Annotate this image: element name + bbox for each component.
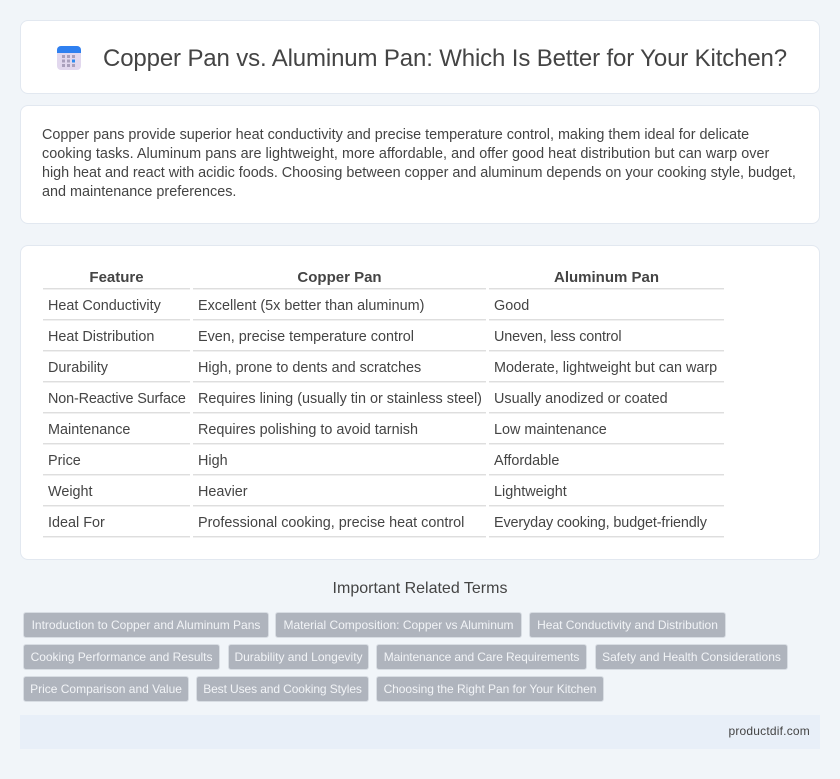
row: non-reactive surface: Usually anodized or coated bbox=[494, 391, 668, 407]
row: heat conductivity: Excellent (5x better than aluminum) bbox=[198, 298, 424, 314]
panel: comparison table bbox=[20, 245, 820, 560]
row: durability: Durability bbox=[48, 360, 108, 376]
row: ideal for: Professional cooking, precise heat control bbox=[198, 515, 464, 531]
row: maintenance: Requires polishing to avoid tarnish bbox=[198, 422, 418, 438]
table header: Feature bbox=[89, 269, 144, 286]
icon: calendar bbox=[57, 46, 81, 70]
tags: related terms: Maintenance and Care Requirements bbox=[384, 650, 579, 664]
title: Copper Pan vs. Aluminum Pan: Which Is Better for Your Kitchen? bbox=[103, 45, 787, 72]
tags: related terms: Heat Conductivity and Distribution bbox=[537, 618, 718, 632]
row: price: Price bbox=[48, 453, 81, 469]
row: price: High bbox=[198, 453, 228, 469]
text block: intro: cooking tasks. Aluminum pans are lightweight, more affordable, and offer good heat distribution but can warp over bbox=[42, 146, 769, 162]
panel: intro bbox=[20, 105, 820, 224]
row: heat conductivity: Good bbox=[494, 298, 529, 314]
table header bbox=[89, 269, 659, 286]
text block: intro: Copper pans provide superior heat conductivity and precise temperature control, making them ideal for delicate bbox=[42, 127, 749, 143]
footer source text: productdif.com bbox=[728, 724, 810, 738]
row: weight bbox=[48, 484, 567, 500]
tags: related terms bbox=[23, 612, 788, 702]
row: maintenance: Low maintenance bbox=[494, 422, 607, 438]
tags: related terms: Choosing the Right Pan for Your Kitchen bbox=[384, 682, 596, 696]
row: ideal for: Everyday cooking, budget-friendly bbox=[494, 515, 707, 531]
row: maintenance: Maintenance bbox=[48, 422, 130, 438]
row: durability: High, prone to dents and scratches bbox=[198, 360, 421, 376]
row: maintenance bbox=[48, 422, 607, 438]
row: weight: Lightweight bbox=[494, 484, 567, 500]
row: non-reactive surface bbox=[48, 391, 668, 407]
row: non-reactive surface: Non-Reactive Surface bbox=[48, 391, 186, 407]
table header: Copper Pan bbox=[297, 269, 382, 286]
text block: intro bbox=[42, 127, 796, 200]
row: heat distribution: Even, precise temperature control bbox=[198, 329, 414, 345]
row: weight: Heavier bbox=[198, 484, 248, 500]
tags: related terms: Best Uses and Cooking Styles bbox=[203, 682, 362, 696]
heading: related terms: Important Related Terms bbox=[333, 580, 507, 597]
row: heat conductivity bbox=[48, 298, 529, 314]
row: heat distribution: Uneven, less control bbox=[494, 329, 621, 345]
text block: intro: and maintenance preferences. bbox=[42, 184, 236, 200]
row: ideal for: Ideal For bbox=[48, 515, 105, 531]
row: non-reactive surface: Requires lining (usually tin or stainless steel) bbox=[198, 391, 482, 407]
row: heat distribution: Heat Distribution bbox=[48, 329, 154, 345]
row: price bbox=[48, 453, 559, 469]
row: ideal for bbox=[48, 515, 707, 531]
tags: related terms: Durability and Longevity bbox=[234, 650, 363, 664]
table header: Aluminum Pan bbox=[554, 269, 659, 286]
row: price: Affordable bbox=[494, 453, 559, 469]
tags: related terms: Cooking Performance and Results bbox=[31, 650, 212, 664]
row: durability bbox=[48, 360, 717, 376]
row: durability: Moderate, lightweight but can warp bbox=[494, 360, 717, 376]
tags: related terms: Safety and Health Considerations bbox=[602, 650, 781, 664]
tags: related terms: Material Composition: Copper vs Aluminum bbox=[283, 618, 514, 632]
row: heat conductivity: Heat Conductivity bbox=[48, 298, 161, 314]
footer bbox=[20, 715, 820, 749]
row: heat distribution bbox=[48, 329, 621, 345]
tags: related terms: Introduction to Copper and Aluminum Pans bbox=[32, 618, 260, 632]
tags: related terms: Price Comparison and Value bbox=[30, 682, 182, 696]
text block: intro: high heat and react with acidic foods. Choosing between copper and aluminum depends on your cooking style, budget, bbox=[42, 165, 796, 181]
row: weight: Weight bbox=[48, 484, 93, 500]
panel: header bbox=[20, 20, 820, 94]
